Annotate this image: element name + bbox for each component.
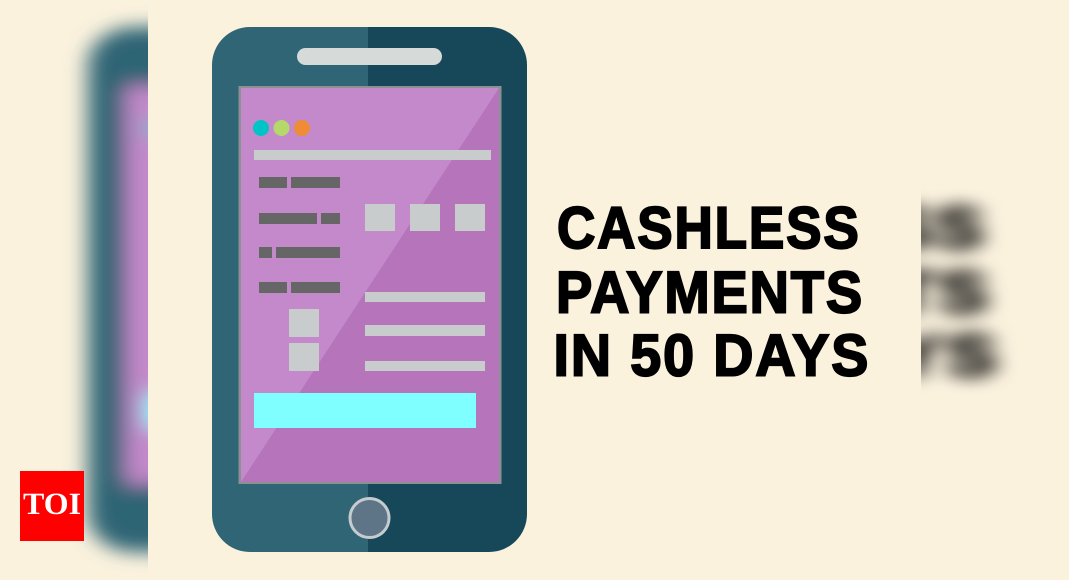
cyan button	[254, 393, 476, 428]
grey lines on the right	[365, 292, 485, 371]
screen	[238, 86, 502, 484]
home button	[350, 498, 389, 538]
two stacked grey squares	[289, 309, 319, 371]
blurred backdrop: title: PAYMENTS	[564, 260, 991, 326]
title: IN 50 DAYS	[554, 322, 870, 388]
blurred backdrop: title: IN 50 DAYS	[561, 322, 999, 388]
window control dots	[253, 120, 310, 136]
blurred backdrop: title: CASHLESS	[566, 195, 986, 261]
title	[554, 195, 870, 388]
blurred backdrop: phone	[88, 27, 524, 552]
central cream panel	[148, 0, 921, 580]
dark text lines	[259, 177, 340, 293]
speaker	[297, 48, 442, 65]
phone body	[212, 27, 527, 552]
TOI logo	[20, 471, 84, 541]
title: PAYMENTS	[556, 260, 864, 326]
address bar	[254, 150, 491, 160]
TOI logo: TOI	[23, 486, 81, 521]
phone illustration	[212, 27, 527, 552]
title: CASHLESS	[557, 195, 861, 261]
three grey squares	[365, 204, 485, 231]
blurred backdrop: title	[561, 195, 999, 388]
